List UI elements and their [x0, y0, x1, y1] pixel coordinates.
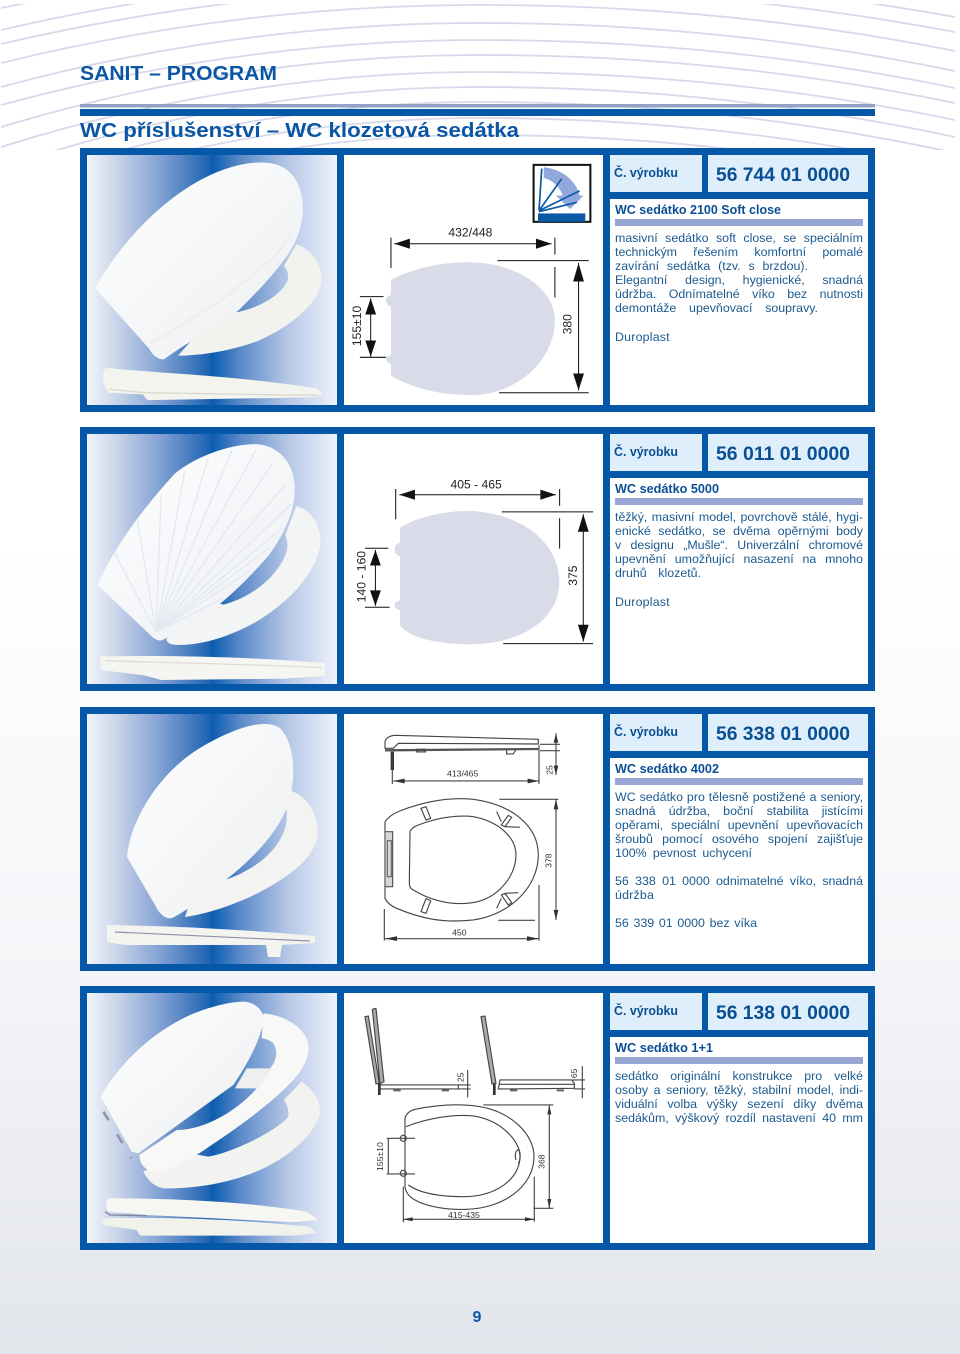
- background wave lines: [1, 4, 955, 150]
- description text: technickým řešením komfortní pomalé: [615, 245, 863, 259]
- technical drawing: 413/465: [447, 769, 478, 779]
- dimension drawing: 405 - 465: [450, 477, 502, 491]
- dimension drawing: 375: [566, 565, 580, 586]
- technical drawing: 155±10: [375, 1142, 385, 1171]
- description text: [615, 1069, 863, 1129]
- description text: Duroplast: [615, 595, 670, 609]
- description text: šroubů pomocí osového spojení zajišťuje: [615, 832, 863, 846]
- description text: demontáže upevňovací soupravy.: [615, 301, 818, 315]
- product name: WC sedátko 1+1: [615, 1041, 713, 1055]
- photo: seat with lid: [95, 162, 323, 400]
- description text: údržba: [615, 888, 654, 902]
- description text: Duroplast: [615, 330, 670, 344]
- description text: v designu „Mušle“. Univerzální chromové: [615, 538, 863, 552]
- technical drawing: [384, 733, 560, 941]
- product number: 56 338 01 0000: [716, 724, 850, 745]
- technical drawing: 25: [544, 765, 554, 775]
- photo: seat for seniors: [107, 724, 318, 957]
- dimension drawing: 140 - 160: [355, 551, 369, 602]
- panel: WC sedátko 2100 Soft close: [80, 148, 875, 412]
- product name: WC sedátko 5000: [615, 482, 719, 496]
- label: product number caption: Č. výrobku: [614, 165, 678, 180]
- label: product number caption: Č. výrobku: [614, 1003, 678, 1018]
- description text: snadná údržba, boční stabilita jistícími: [615, 804, 863, 818]
- photo: double seat: [101, 1002, 320, 1236]
- label: product number caption: Č. výrobku: [614, 724, 678, 739]
- dimension drawing: 155±10: [350, 306, 364, 346]
- technical drawing: [365, 1008, 585, 1222]
- dimension drawing: [355, 477, 593, 644]
- technical drawing: 415-435: [448, 1210, 480, 1220]
- description text: [615, 510, 863, 620]
- description text: WC sedátko pro tělesně postižené a seniory,: [615, 790, 863, 804]
- description text: opěrami, speciální upevnění upevňovacích: [615, 818, 863, 832]
- description text: zavírání sedátka (tzv. s brzdou).: [615, 259, 808, 273]
- panel: WC sedátko 1+1: [80, 986, 875, 1250]
- heading: SANIT program: SANIT – PROGRAM: [80, 63, 277, 85]
- label: product number caption: Č. výrobku: [614, 444, 678, 459]
- description text: údržba. Odnímatelné víko bez nutnosti: [615, 287, 863, 301]
- product name: WC sedátko 4002: [615, 762, 719, 776]
- panel: WC sedátko 5000: [80, 427, 875, 691]
- dimension drawing: 432/448: [448, 226, 493, 240]
- product name: WC sedátko 2100 Soft close: [615, 203, 781, 217]
- product number: 56 744 01 0000: [716, 165, 850, 186]
- description text: 56 339 01 0000 bez víka: [615, 916, 757, 930]
- heading: section title: WC příslušenství – WC klozetová sedátka: [80, 120, 520, 142]
- description text: [615, 790, 863, 940]
- description text: 56 338 01 0000 odnimatelné víko, snadná: [615, 874, 863, 888]
- description text: upevnění umožňující nasazení na mnoho: [615, 552, 863, 566]
- technical drawing: 378: [543, 853, 553, 868]
- description text: enické sedátko, se dvěma opěrnými body: [615, 524, 863, 538]
- photo: shell pattern seat: [98, 444, 325, 680]
- description text: druhů klozetů.: [615, 566, 701, 580]
- description text: viduální volba výšky sezení díky dvěma: [615, 1097, 863, 1111]
- page number: 9: [473, 1309, 482, 1326]
- description text: Elegantní design, hygienické, snadná: [615, 273, 863, 287]
- header rule: [80, 104, 875, 116]
- description text: těžký, masivní model, povrchově stálé, hygi-: [615, 510, 863, 524]
- description text: sedátko originální konstrukce pro velké: [615, 1069, 863, 1083]
- description text: masivní sedátko soft close, se speciálním: [615, 231, 863, 245]
- description text: sedákům, výškový rozdíl nastavení 40 mm: [615, 1111, 863, 1125]
- icon: soft close: [534, 165, 590, 222]
- product number: 56 011 01 0000: [716, 444, 850, 465]
- product number: 56 138 01 0000: [716, 1003, 850, 1024]
- description text: 100% pevnost uchycení: [615, 846, 752, 860]
- technical drawing: 368: [537, 1154, 547, 1169]
- dimension drawing: [350, 226, 589, 395]
- description text: [615, 231, 863, 351]
- description text: osoby a seniory, těžký, stabilní model, indi-: [615, 1083, 863, 1097]
- dimension drawing: 380: [560, 314, 574, 334]
- panel: WC sedátko 4002: [80, 707, 875, 971]
- technical drawing: 65: [569, 1068, 579, 1078]
- technical drawing: 25: [456, 1072, 466, 1082]
- technical drawing: 450: [452, 927, 467, 937]
